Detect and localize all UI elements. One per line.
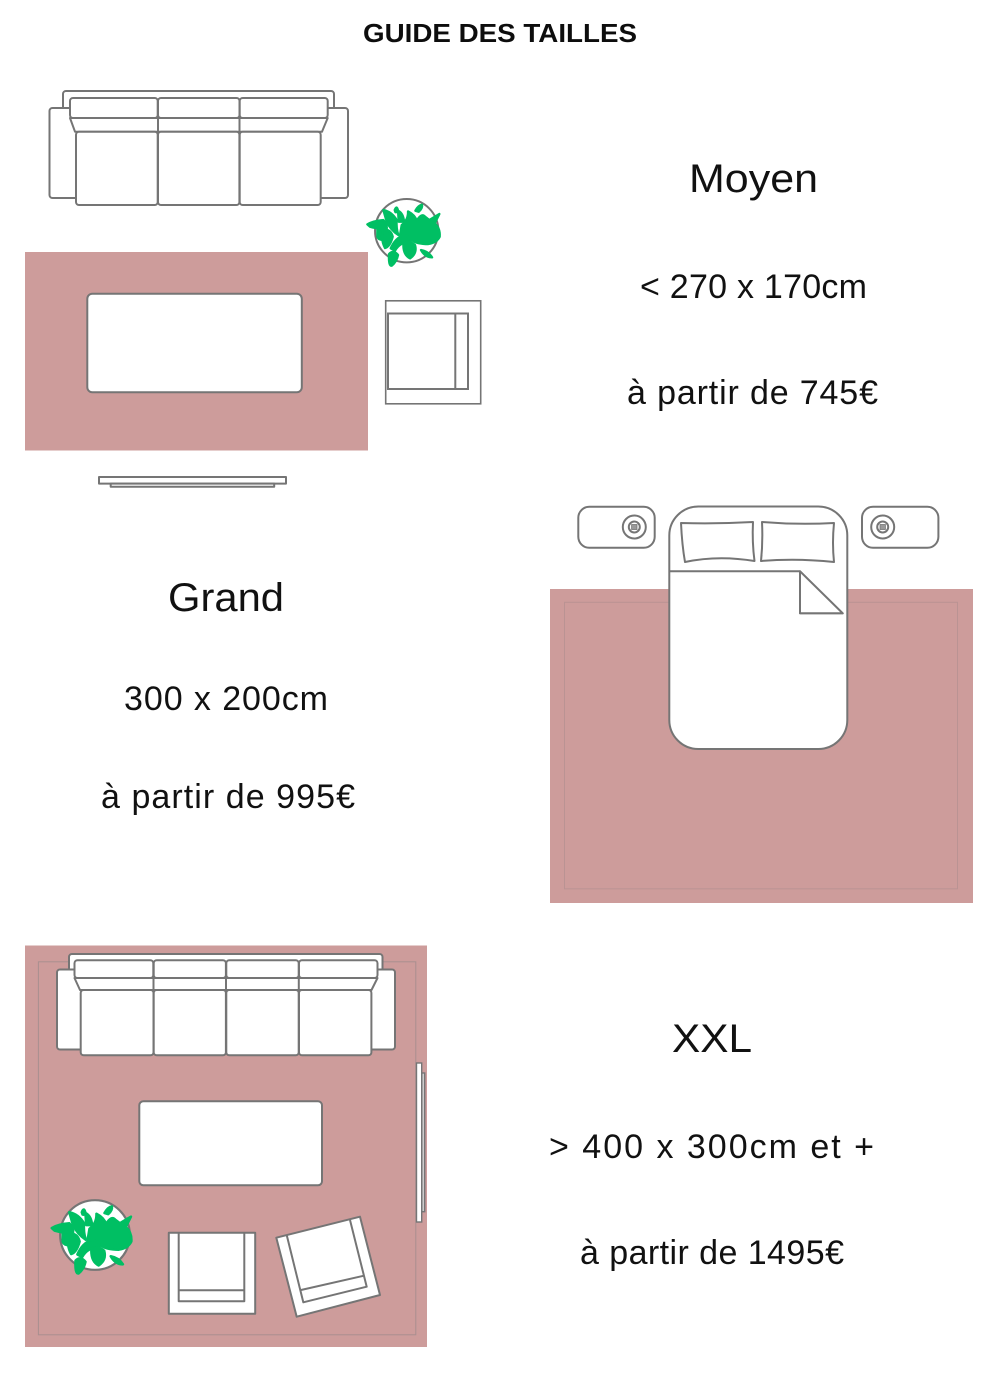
- heading: grand: Grand: [168, 576, 284, 620]
- price: xxl: à partir de 1495€: [580, 1234, 844, 1272]
- sofa: three seats: [50, 91, 348, 205]
- heading: xxl: XXL: [672, 1017, 752, 1061]
- armchair: [386, 301, 481, 404]
- text block: grand: [101, 576, 355, 816]
- panel: grand living room layout: [25, 91, 481, 487]
- rug: moyen: [550, 589, 973, 903]
- sofa: four seats: [57, 954, 395, 1055]
- icon: potted plant: [52, 1200, 131, 1274]
- title: GUIDE DES TAILLES: [363, 18, 637, 48]
- bed: [669, 506, 847, 749]
- text block: xxl: [549, 1017, 874, 1272]
- size: grand: 300 x 200cm: [124, 680, 328, 718]
- text block: moyen: [627, 157, 878, 412]
- pillow left: [681, 522, 754, 562]
- rug: grand: [25, 252, 368, 450]
- size: moyen: < 270 x 170cm: [640, 268, 867, 306]
- coffee table: [139, 1101, 322, 1185]
- armchair: rotated: [276, 1217, 380, 1317]
- rug: xxl: [25, 946, 427, 1347]
- coffee table: [87, 294, 302, 392]
- sheet fold: [800, 571, 843, 613]
- icon: potted plant: [367, 199, 440, 266]
- nightstand left with lamp: [578, 507, 655, 548]
- price: moyen: à partir de 745€: [627, 374, 878, 412]
- heading: moyen: Moyen: [689, 157, 818, 201]
- armchair: straight: [169, 1233, 255, 1314]
- panel: moyen bedroom layout: [550, 506, 973, 903]
- pillow right: [761, 522, 834, 562]
- tv console: [99, 477, 286, 487]
- size: xxl: > 400 x 300cm et +: [549, 1128, 874, 1166]
- nightstand right with lamp: [862, 507, 938, 548]
- price: grand: à partir de 995€: [101, 778, 355, 816]
- panel: xxl living room layout: [25, 946, 427, 1347]
- tv console: [416, 1063, 425, 1222]
